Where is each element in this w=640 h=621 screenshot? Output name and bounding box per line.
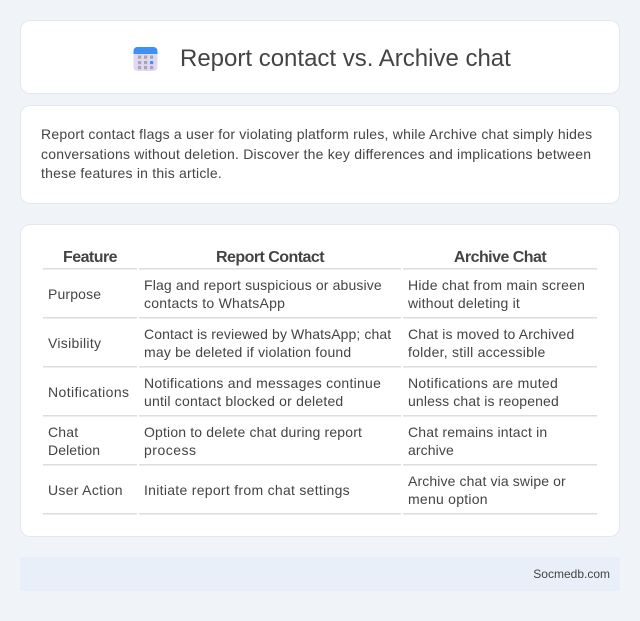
row: Purpose: Flag and report suspicious or abusive	[144, 277, 382, 293]
row: User Action: Archive chat via swipe or	[408, 473, 566, 489]
row: Visibility: Chat is moved to Archived	[408, 326, 574, 342]
panel: comparison table	[20, 224, 620, 537]
row: Visibility: folder, still accessible	[408, 344, 546, 360]
row: Chat Deletion: Option to delete chat during report	[144, 424, 362, 440]
row: Chat Deletion: Deletion	[48, 442, 100, 458]
row: Visibility: Contact is reviewed by WhatsApp; chat	[144, 326, 391, 342]
footer bar	[20, 557, 620, 591]
panel: header	[20, 20, 620, 94]
row: Purpose: contacts to WhatsApp	[144, 295, 285, 311]
intro paragraph: conversations without deletion. Discover the key differences and implications between	[41, 146, 591, 162]
row: User Action: Initiate report from chat settings	[144, 482, 350, 498]
row: Purpose: without deleting it	[408, 295, 520, 311]
row: User Action: menu option	[408, 491, 488, 507]
row: Purpose	[48, 277, 585, 311]
row: User Action: User Action	[48, 482, 123, 498]
icon: calendar	[134, 47, 158, 71]
row: Notifications: unless chat is reopened	[408, 393, 559, 409]
row: Purpose: Hide chat from main screen	[408, 277, 585, 293]
row: Notifications: Notifications	[48, 384, 129, 400]
intro paragraph: Report contact flags a user for violating platform rules, while Archive chat simply hides	[41, 126, 592, 142]
table header: Report Contact: Report Contact	[216, 249, 324, 266]
row: Chat Deletion: archive	[408, 442, 454, 458]
row: User Action	[48, 473, 566, 507]
intro paragraph	[41, 126, 592, 181]
row: Notifications: Notifications and messages continue	[144, 375, 381, 391]
footer credit: Socmedb.com	[533, 567, 610, 581]
row: Chat Deletion	[48, 424, 547, 458]
table header: Feature: Feature	[63, 249, 117, 266]
row: Notifications: until contact blocked or deleted	[144, 393, 343, 409]
row: Chat Deletion: Chat	[48, 424, 78, 440]
row: Chat Deletion: Chat remains intact in	[408, 424, 547, 440]
row: Visibility	[48, 326, 574, 360]
panel: intro text	[20, 105, 620, 204]
row: Visibility: may be deleted if violation found	[144, 344, 351, 360]
row: Chat Deletion: process	[144, 442, 197, 458]
row: Notifications	[48, 375, 559, 409]
row: Visibility: Visibility	[48, 335, 101, 351]
title: Report contact vs. Archive chat	[180, 45, 511, 72]
row: Notifications: Notifications are muted	[408, 375, 558, 391]
table header: Archive Chat: Archive Chat	[454, 249, 546, 266]
intro paragraph: these features in this article.	[41, 165, 222, 181]
row: Purpose: Purpose	[48, 286, 101, 302]
